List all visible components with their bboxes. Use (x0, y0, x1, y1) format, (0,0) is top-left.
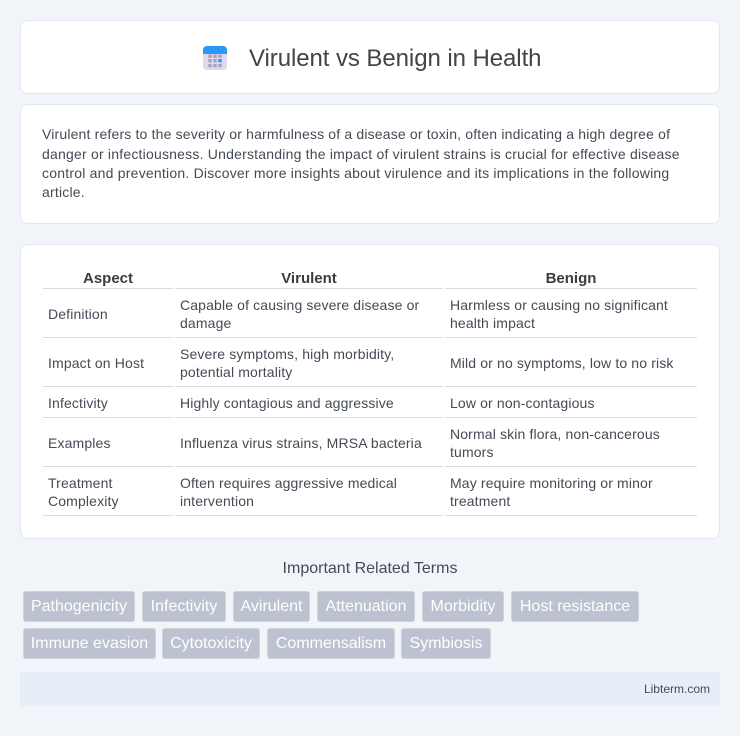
tags: related terms: Pathogenicity (31, 598, 127, 615)
row: impact on host: potential mortality (180, 364, 292, 380)
tags: related terms (23, 591, 639, 659)
text block: intro: article. (42, 184, 85, 200)
tags: related terms: Attenuation (326, 598, 406, 615)
row: treatment complexity: May require monitoring or minor (450, 475, 653, 491)
row: examples (48, 426, 660, 460)
tags: related terms: Symbiosis (410, 635, 482, 652)
text block: intro: control and prevention. Discover more insights about virulence and its implications in the following (42, 165, 669, 181)
row: treatment complexity: treatment (450, 493, 510, 509)
row: treatment complexity: Often requires aggressive medical (180, 475, 397, 491)
text block: intro: Virulent refers to the severity or harmfulness of a disease or toxin, often indicating a high degree of (42, 126, 670, 142)
row: treatment complexity: Treatment (48, 475, 113, 491)
tags: related terms: Immune evasion (31, 635, 148, 652)
tags: related terms: Cytotoxicity (170, 635, 252, 652)
row: definition (48, 297, 668, 331)
comparison table (43, 270, 697, 516)
title: Virulent vs Benign in Health (249, 45, 541, 72)
row: definition: health impact (450, 315, 535, 331)
row: infectivity: Infectivity (48, 395, 108, 411)
panel: comparison table (20, 244, 720, 539)
row: definition: Definition (48, 306, 108, 322)
row: infectivity: Highly contagious and aggressive (180, 395, 394, 411)
tags: related terms: Morbidity (431, 598, 495, 615)
row: examples: Normal skin flora, non-cancerous (450, 426, 660, 442)
row: definition: Harmless or causing no significant (450, 297, 668, 313)
table header (83, 270, 596, 287)
row: treatment complexity: Complexity (48, 493, 119, 509)
row: treatment complexity (48, 475, 653, 509)
footer credit: Libterm.com (644, 682, 710, 696)
row: treatment complexity: intervention (180, 493, 254, 509)
row: examples: Influenza virus strains, MRSA bacteria (180, 435, 422, 451)
row: examples: Examples (48, 435, 111, 451)
row: infectivity (48, 395, 595, 411)
row: impact on host: Mild or no symptoms, low to no risk (450, 355, 674, 371)
tags: related terms: Avirulent (241, 598, 302, 615)
text block: intro (42, 126, 680, 200)
text block: intro: danger or infectiousness. Understanding the impact of virulent strains is crucial for effective disease (42, 146, 680, 162)
table header: Aspect (83, 270, 133, 287)
row: examples: tumors (450, 444, 494, 460)
footer bar (20, 672, 720, 706)
row: impact on host: Impact on Host (48, 355, 144, 371)
tags: related terms: Commensalism (276, 635, 386, 652)
row: impact on host (48, 346, 674, 380)
heading: related terms: Important Related Terms (283, 560, 457, 577)
row: impact on host: Severe symptoms, high morbidity, (180, 346, 394, 362)
panel: title card (20, 20, 720, 94)
table header: Virulent (281, 270, 337, 287)
row: infectivity: Low or non-contagious (450, 395, 595, 411)
tags: related terms: Host resistance (520, 598, 630, 615)
row: definition: Capable of causing severe disease or (180, 297, 419, 313)
icon: calendar (203, 46, 227, 70)
panel: intro paragraph (20, 104, 720, 224)
row: definition: damage (180, 315, 231, 331)
tags: related terms: Infectivity (151, 598, 217, 615)
table header: Benign (546, 270, 596, 287)
